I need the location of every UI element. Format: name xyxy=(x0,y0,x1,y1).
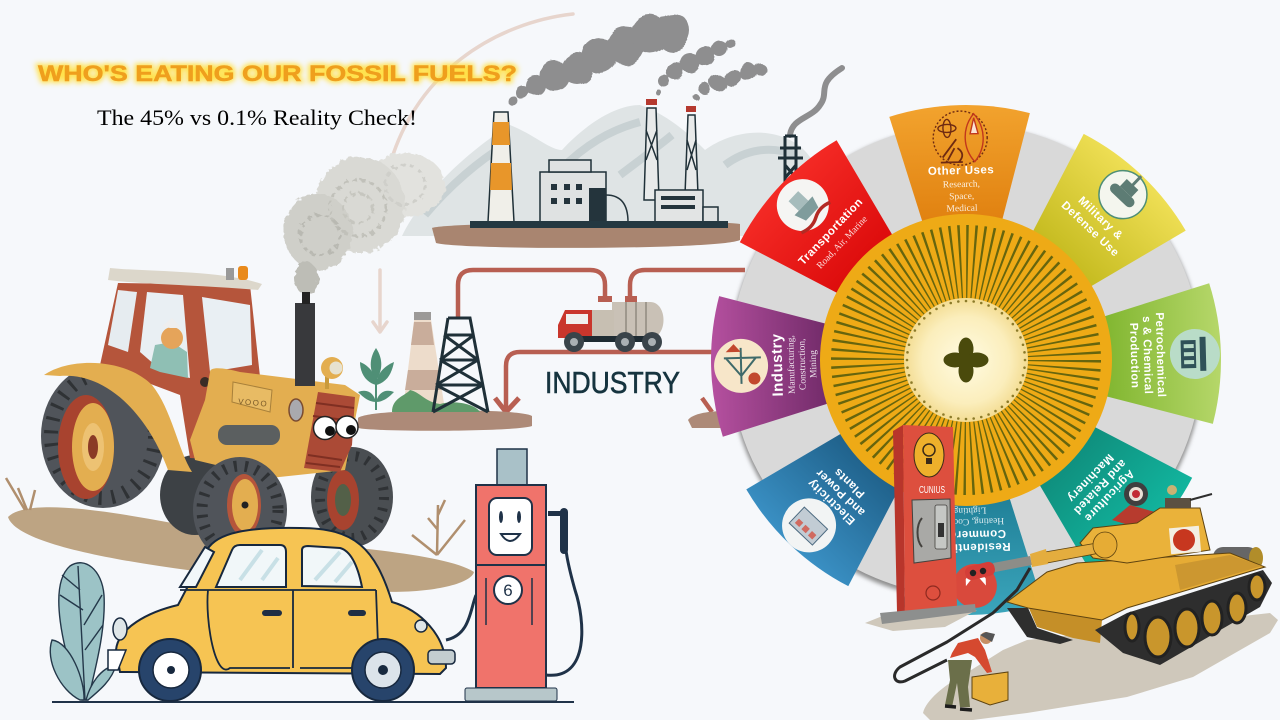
exhaust stack xyxy=(295,292,315,386)
headlight xyxy=(289,399,303,421)
segment: residential and commercial: Residential & xyxy=(931,540,1011,554)
tractor eyes xyxy=(314,416,358,440)
road wheels xyxy=(1125,574,1265,657)
title: WHO'S EATING OUR FOSSIL FUELS? xyxy=(38,61,517,86)
tank scene ground xyxy=(923,613,1278,720)
far track xyxy=(1007,608,1073,644)
segment: residential and commercial: Heating, Cooling, xyxy=(936,515,1004,527)
tractor xyxy=(6,266,474,592)
car body xyxy=(116,528,446,674)
segment: petrochemicals: s & Chemical xyxy=(1140,316,1154,395)
red fuel pump with logo: CUNIUS xyxy=(919,485,945,496)
engine deck xyxy=(1175,555,1262,590)
bulb logo xyxy=(914,433,944,477)
plus icon xyxy=(944,338,988,382)
hood badge: VOOO xyxy=(238,397,269,409)
industry label: INDUSTRY xyxy=(545,365,680,400)
fender xyxy=(44,363,192,472)
hood badge xyxy=(232,382,272,412)
segment: other uses: Research, xyxy=(943,180,980,191)
machine gun xyxy=(1165,485,1212,508)
segment: transportation: Transportation xyxy=(797,196,866,268)
gold hub xyxy=(820,214,1112,506)
segment: military and defense use xyxy=(1008,127,1193,311)
pump scene ground xyxy=(865,610,977,631)
segment: industry: Mining xyxy=(809,350,819,378)
segment: petrochemicals xyxy=(1099,283,1223,427)
gun barrel xyxy=(964,532,1117,581)
segment: electricity xyxy=(739,409,924,593)
segment: transportation xyxy=(733,133,917,318)
icon: power plant xyxy=(771,487,847,564)
pump number xyxy=(494,576,522,604)
main plant building xyxy=(540,160,628,222)
dark smoke plumes xyxy=(507,13,766,105)
grey ring xyxy=(729,126,1203,600)
pipelines xyxy=(458,270,745,412)
segment: transportation: Road, Air, Marine xyxy=(815,215,870,271)
segment: residential and commercial xyxy=(899,493,1043,617)
military tank xyxy=(964,482,1272,665)
icon: refinery xyxy=(1169,328,1221,380)
turret xyxy=(1080,508,1210,563)
icon: science xyxy=(932,110,988,166)
teal plant xyxy=(50,563,116,700)
rear engine xyxy=(1213,547,1263,569)
segment: military and defense use: Defense Use xyxy=(1059,199,1121,259)
lower hull xyxy=(1028,606,1102,643)
segment: other uses xyxy=(889,103,1033,227)
far front wheel xyxy=(311,447,393,547)
icon: flame xyxy=(952,563,997,608)
fuel hose xyxy=(895,568,1030,682)
oil derrick xyxy=(433,318,488,412)
segment: petrochemicals: Production xyxy=(1127,323,1141,389)
exhaust side pipe xyxy=(218,425,280,445)
segment: industry: Industry xyxy=(768,333,787,397)
door lines xyxy=(180,590,378,670)
pump smiley face xyxy=(489,498,532,555)
pump panel xyxy=(912,499,951,563)
segment: agriculture: Machinery xyxy=(1064,451,1116,504)
leafy plant xyxy=(358,348,394,410)
title: WHO'S EATING OUR FOSSIL FUELS? xyxy=(38,61,517,86)
red fuel pump with logo xyxy=(880,425,976,624)
right plant building xyxy=(655,190,718,222)
wheel chart xyxy=(709,103,1223,617)
twin towers xyxy=(644,99,698,200)
icon: crane xyxy=(713,338,769,394)
hull top xyxy=(1007,553,1265,620)
gunner figure behind tank xyxy=(1112,482,1155,530)
grille xyxy=(304,392,355,472)
segment: agriculture: Agriculture xyxy=(1082,467,1136,524)
ground strip: industry right xyxy=(688,411,740,428)
big rear wheel xyxy=(41,364,165,508)
hidden rear wheel xyxy=(160,455,230,535)
segment: residential and commercial: Lighting xyxy=(953,505,986,515)
segment: petrochemicals: Petrochemical xyxy=(1153,312,1167,398)
thin derrick smoke xyxy=(790,68,842,135)
segment: other uses: Space, xyxy=(949,192,974,202)
ground strip xyxy=(432,222,740,248)
segment: residential and commercial: Commercial xyxy=(935,527,1006,541)
green bush xyxy=(392,390,480,412)
ground strip: industry left xyxy=(358,410,532,431)
hood xyxy=(190,368,360,478)
main track xyxy=(1095,570,1272,665)
man with fuel can xyxy=(945,632,1008,710)
ground line xyxy=(52,701,574,703)
mountains xyxy=(402,105,832,236)
segment: electricity: and Power xyxy=(814,466,868,518)
pump number: 6 xyxy=(503,581,513,600)
icon: ship xyxy=(766,168,840,242)
windows xyxy=(180,545,362,587)
striped tower xyxy=(403,312,445,410)
near front wheel xyxy=(193,457,287,563)
wheels xyxy=(139,639,414,701)
fuel can xyxy=(972,672,1008,705)
smoke cloud over tractor xyxy=(284,153,445,294)
segment: industry xyxy=(709,293,833,437)
segment: electricity: Plants xyxy=(832,465,867,500)
tanker truck xyxy=(558,296,664,352)
segment: other uses: Other Uses xyxy=(928,164,994,178)
segment: agriculture: and Related xyxy=(1071,457,1128,516)
segment: industry: Construction, xyxy=(797,338,809,390)
factory scene xyxy=(402,13,842,248)
curved pink arrow line from top xyxy=(373,14,573,332)
dirt ground xyxy=(8,507,474,592)
dry grass right xyxy=(412,500,465,555)
cab xyxy=(100,266,262,462)
segment: industry: Manufacturing, xyxy=(785,335,798,394)
cream center xyxy=(904,298,1028,422)
small derrick xyxy=(778,136,803,185)
segment: other uses: Medical xyxy=(946,204,978,214)
dry grass left xyxy=(6,478,35,510)
subtitle: The 45% vs 0.1% Reality Check! xyxy=(97,105,417,130)
striped chimney xyxy=(488,112,514,222)
segment: electricity: Electricity xyxy=(806,476,858,527)
segment: military and defense use: Military & xyxy=(1076,195,1125,242)
fuel pump xyxy=(446,449,582,701)
yellow car xyxy=(108,528,455,701)
icon: tank badge xyxy=(1089,159,1158,229)
lamp xyxy=(321,357,343,389)
segment: agriculture xyxy=(1015,402,1199,587)
turret emblem xyxy=(1169,526,1201,554)
driver xyxy=(150,318,188,378)
